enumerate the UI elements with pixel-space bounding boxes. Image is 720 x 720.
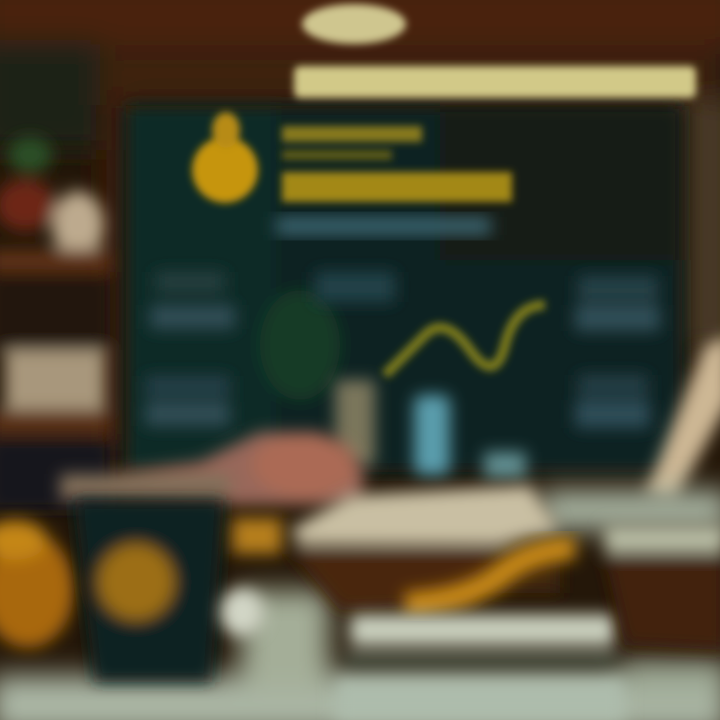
chalkboard panel [126, 106, 682, 472]
icon: gold pear-shaped logo [192, 112, 258, 203]
white book stack [335, 614, 625, 720]
left shelves [0, 137, 110, 510]
subtitle: blurred blue line [276, 217, 491, 235]
coffee cup [74, 500, 224, 682]
gold patch beside cup [220, 518, 282, 636]
wooden ceiling [0, 0, 720, 460]
book stack with brown drink [290, 485, 560, 610]
right bowl [605, 525, 720, 650]
light bar [294, 66, 696, 98]
line chart [385, 305, 545, 375]
hand and arm [60, 432, 365, 505]
title: blurred gold heading [282, 126, 512, 202]
gold ribbon [405, 548, 575, 604]
ceiling lamp [302, 4, 406, 44]
orange pastries left [0, 520, 74, 648]
blue bottle [335, 380, 526, 478]
right arm [645, 335, 720, 500]
table bottom [0, 490, 720, 720]
text blocks: blurred labels [145, 272, 660, 428]
